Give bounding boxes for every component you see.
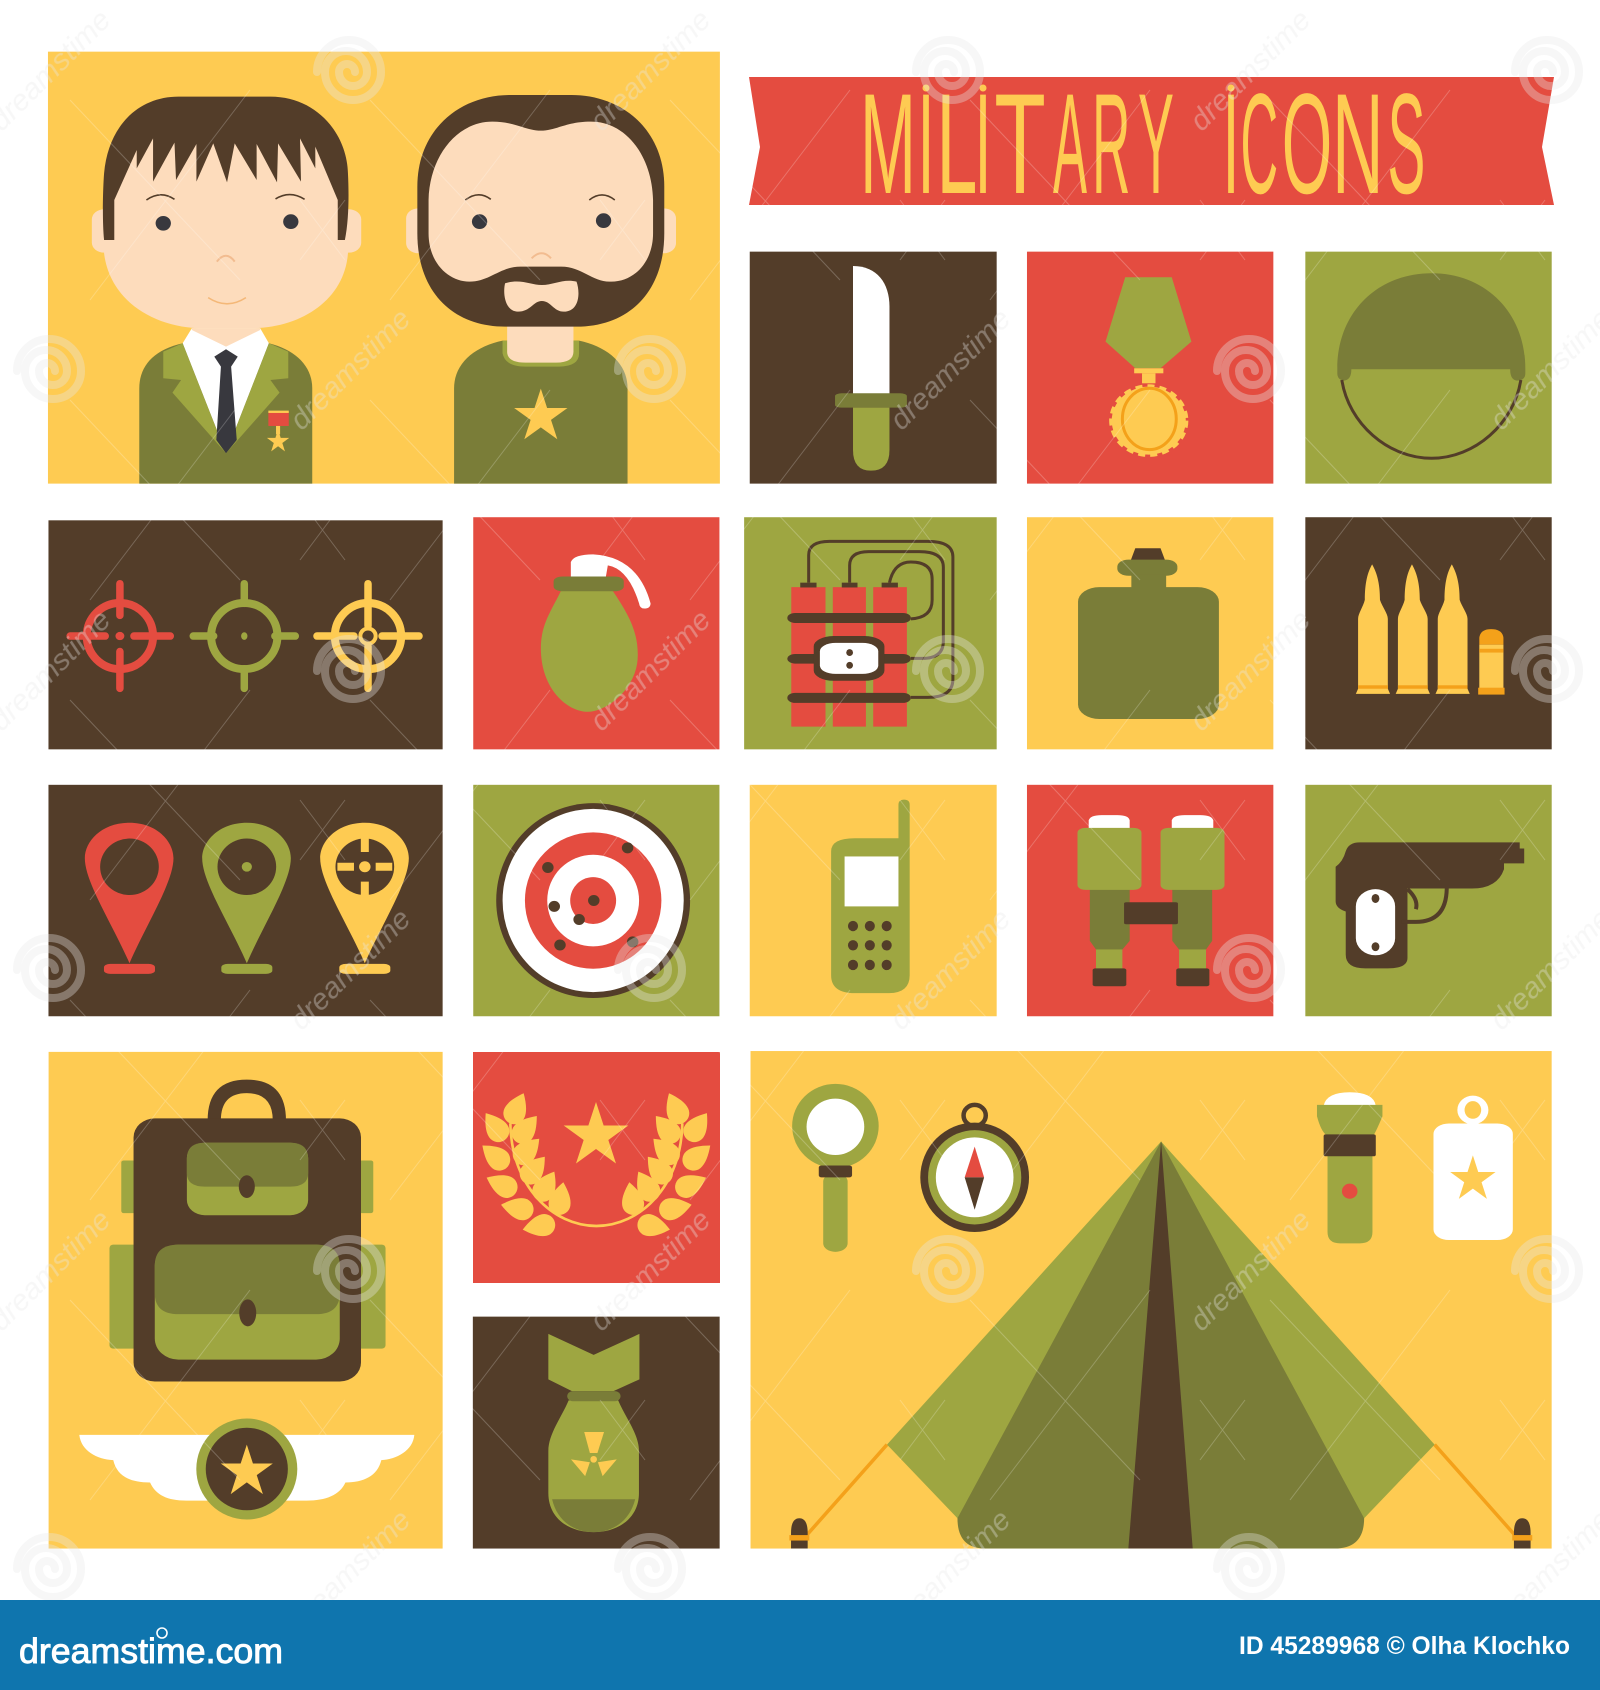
title text: M <box>860 65 916 224</box>
title text: N <box>1332 65 1384 224</box>
title text: I <box>974 65 992 224</box>
watermark overlay: dreamstime <box>883 902 1017 1036</box>
watermark overlay: dreamstime <box>283 1503 417 1637</box>
title banner: S <box>1387 65 1425 224</box>
icon: knife <box>835 266 907 471</box>
panel: shooting target <box>473 785 719 1016</box>
icon: compass <box>920 1105 1029 1232</box>
title text: O <box>1282 65 1332 224</box>
panel: flask <box>1027 517 1273 749</box>
icon: binoculars <box>1077 815 1225 986</box>
icon: winged star badge <box>79 1418 414 1520</box>
title text: L <box>936 65 977 224</box>
icon: backpack <box>109 1080 386 1381</box>
watermark overlay: dreamstime <box>583 1203 717 1337</box>
icon: pistol <box>1336 842 1524 968</box>
icon: yellow crosshair <box>317 584 419 688</box>
icon: medal <box>1106 277 1191 455</box>
title text: C <box>1240 65 1278 224</box>
icon: olive pin <box>202 823 291 974</box>
panel: soldier portraits <box>48 52 720 484</box>
icon: target <box>496 803 690 998</box>
icon: nuclear bomb <box>548 1334 639 1532</box>
footer logo spiral <box>157 1628 167 1638</box>
watermark overlay: dreamstime <box>1183 603 1317 737</box>
panel: backpack and wings <box>49 1052 443 1549</box>
panel: camp tent <box>751 1051 1552 1549</box>
title banner <box>749 65 1554 224</box>
watermark overlay: dreamstime <box>883 1503 1017 1637</box>
watermark overlay: dreamstime <box>283 902 417 1036</box>
icon: flask <box>1078 548 1219 719</box>
icon: bearded soldier <box>406 95 676 484</box>
icon: red crosshair <box>70 584 170 688</box>
icon: magnifier <box>792 1084 879 1252</box>
watermark overlay: dreamstime <box>583 3 717 137</box>
footer credit: ID 45289968 © Olha Klochko <box>1239 1632 1570 1660</box>
icon: helmet <box>1337 273 1525 458</box>
panel: binoculars <box>1027 785 1273 1016</box>
panel: dynamite <box>744 517 997 749</box>
panel: ammunition <box>1305 517 1552 749</box>
watermark overlay: dreamstime <box>583 603 717 737</box>
panel: knife <box>750 252 997 484</box>
icon: red pin <box>85 823 173 974</box>
title text: T <box>994 65 1046 224</box>
icon: dynamite <box>787 541 953 727</box>
title text: I <box>918 65 934 224</box>
panel: helmet <box>1305 252 1552 484</box>
icon: star <box>564 1102 628 1164</box>
title text: R <box>1092 65 1130 224</box>
footer logo text: dreamstime.com <box>19 1632 283 1671</box>
icon: tent <box>789 1142 1532 1549</box>
watermark overlay: dreamstime <box>883 302 1017 436</box>
icon: radio phone <box>831 800 910 993</box>
icon: grenade <box>541 554 651 712</box>
icon: bullets <box>1356 564 1505 695</box>
panel: grenade <box>473 517 719 749</box>
title text: Y <box>1138 65 1173 224</box>
watermark overlay: dreamstime <box>1183 3 1317 137</box>
panel: bomb <box>473 1317 720 1549</box>
watermark overlay: dreamstime <box>1183 1203 1317 1337</box>
icon: flashlight <box>1317 1092 1382 1243</box>
icon: laurel wreath <box>475 1089 717 1240</box>
footer bar <box>0 1600 1600 1690</box>
title text: I <box>1222 65 1240 224</box>
panel: crosshairs <box>48 520 443 749</box>
panel: laurel wreath <box>473 1052 720 1283</box>
panel: map pins <box>48 785 443 1016</box>
panel: pistol <box>1305 785 1552 1016</box>
icon: officer in suit <box>92 97 361 484</box>
icon: olive crosshair <box>193 584 295 688</box>
panel: phone <box>750 785 997 1016</box>
watermark overlay: dreamstime <box>283 302 417 436</box>
icon: dog tag <box>1433 1096 1513 1240</box>
title text: A <box>1053 65 1087 224</box>
icon: yellow pin <box>320 823 409 974</box>
panel: medal <box>1027 252 1273 484</box>
